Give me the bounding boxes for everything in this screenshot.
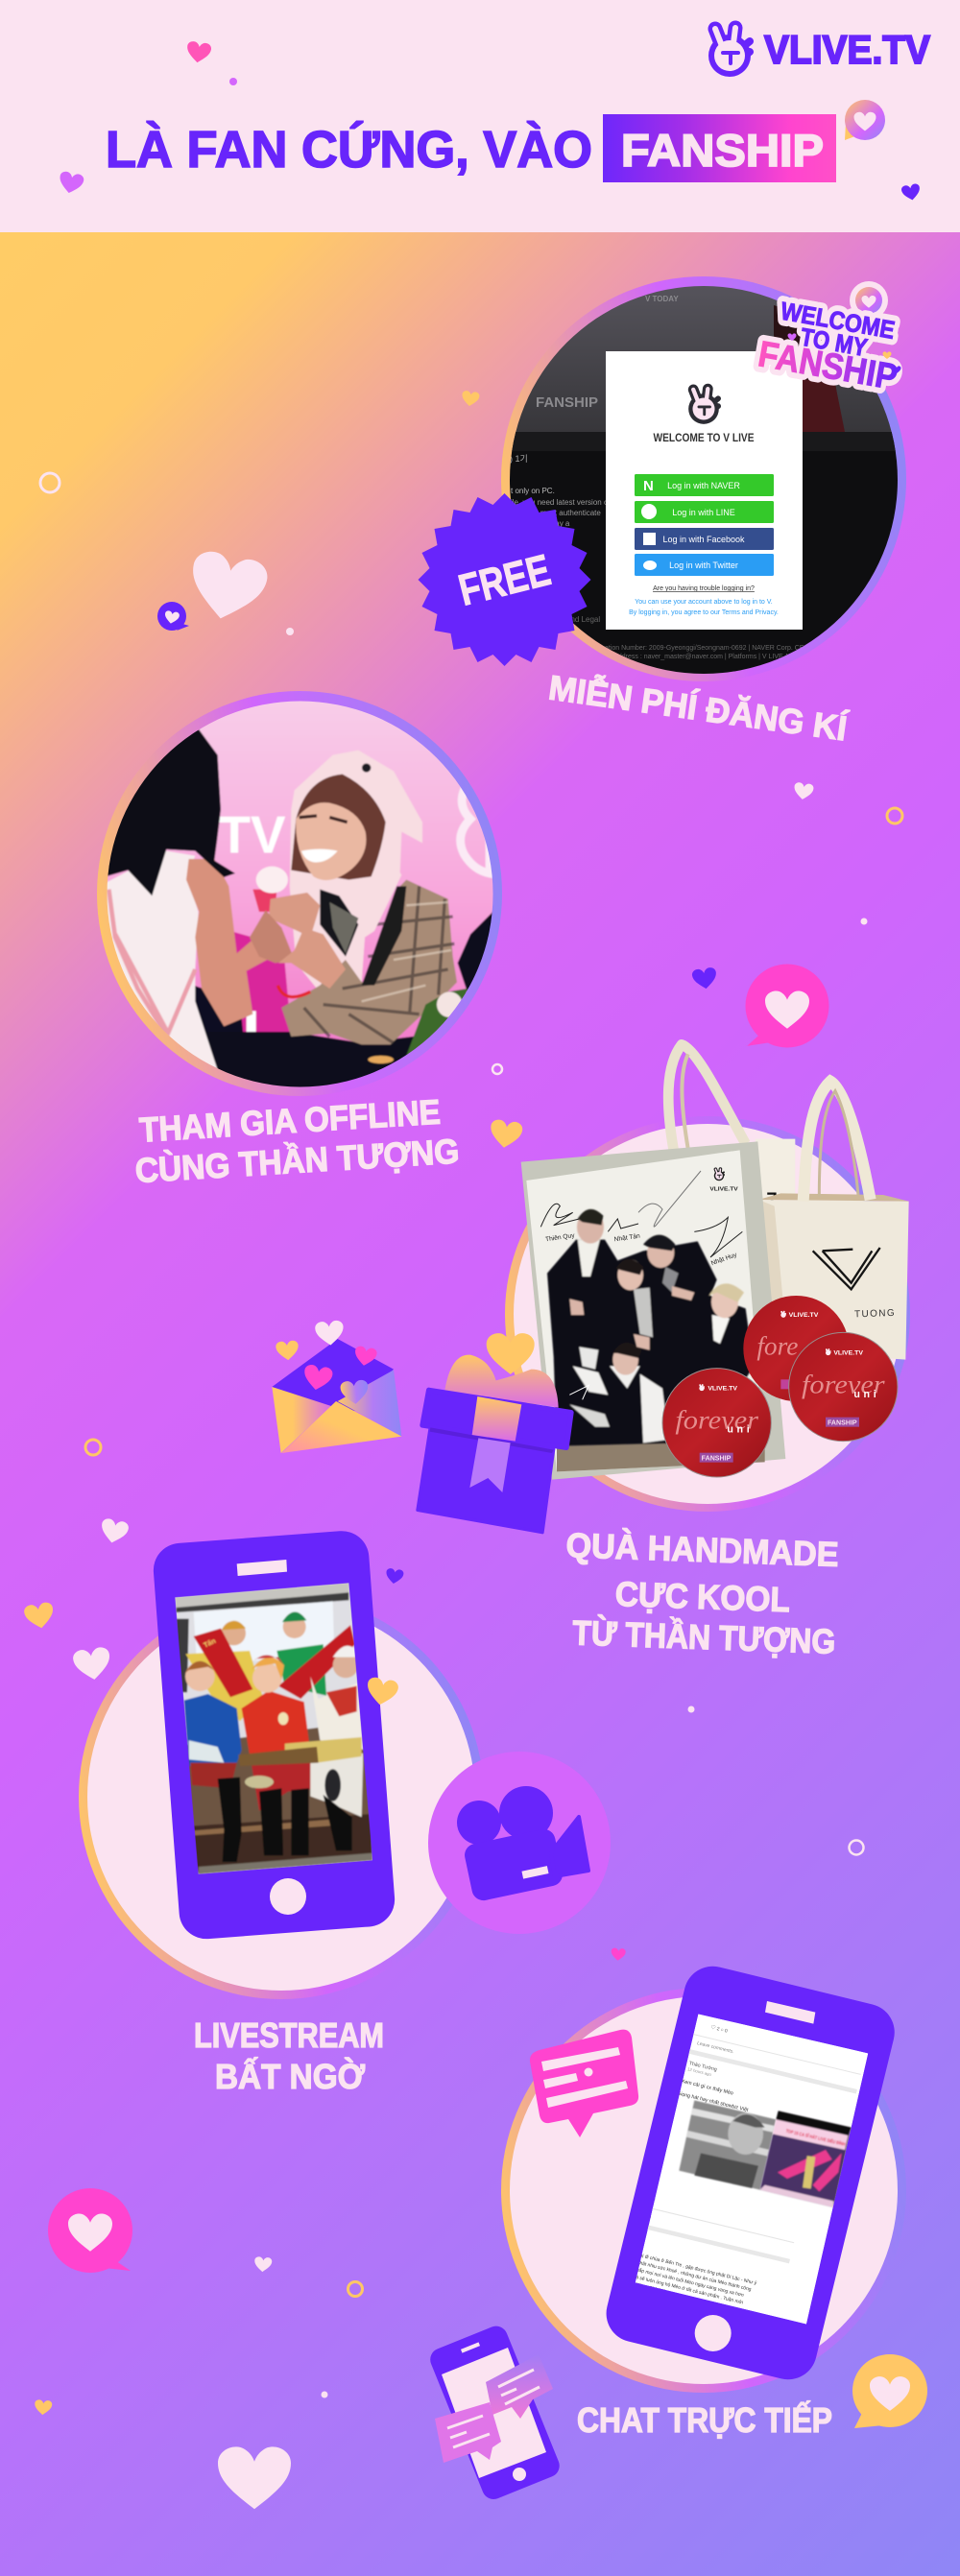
tote bag front: TUONG	[854, 1308, 895, 1320]
small phone screen	[442, 2348, 546, 2478]
badge: left: VLIVE.TV	[708, 1385, 738, 1392]
gradient ring	[501, 276, 906, 681]
badge: middle	[743, 1296, 849, 1401]
logo wordmark: VLIVE.TV	[764, 27, 930, 72]
title text: LÀ FAN CỨNG, VÀO	[106, 121, 592, 179]
pale disc	[514, 1124, 901, 1504]
badge: right: FANSHIP	[828, 1419, 857, 1426]
chat screenshot: Bảo Trần Triệu	[606, 2225, 640, 2238]
gradient ring	[97, 691, 502, 1096]
title	[106, 114, 836, 182]
badge: right: uni	[853, 1389, 876, 1400]
icon: small phone with chat bubbles	[427, 2323, 563, 2503]
phone with chat	[580, 1961, 900, 2385]
sticker words: TO MY	[799, 322, 870, 362]
speaker	[765, 2001, 815, 2024]
login card: By logging in, you agree to our Terms and Privacy.	[629, 609, 779, 616]
chat screenshot: ♡ 2 ○ 0	[710, 2025, 729, 2035]
envelope	[272, 1320, 401, 1453]
label: handmade gifts	[563, 1525, 839, 1661]
badge: middle: fore	[756, 1332, 798, 1361]
photo: singer black and white	[679, 2100, 776, 2190]
avatar	[673, 2057, 685, 2069]
label: offline meeting	[132, 1091, 460, 1190]
VLIVE.TV logo	[708, 27, 930, 77]
merch photo	[521, 1044, 909, 1480]
header decorations	[57, 40, 922, 202]
sticker backing: TO MY	[799, 322, 870, 362]
badge: left: forever	[675, 1405, 758, 1434]
photo: singer on stage	[760, 2111, 852, 2207]
chat screenshot: Giọng hát hay nhất showbiz Việt	[676, 2090, 749, 2113]
login card: WELCOME TO V LIVE	[653, 431, 755, 444]
photo: singer on stage: TOP 15 CA SĨ HÁT LIVE SIÊU ĐỈNH	[785, 2127, 847, 2148]
badge: middle: VLIVE.TV	[789, 1312, 819, 1319]
button: Twitter	[635, 554, 774, 576]
sticker backing	[756, 294, 907, 398]
chat screenshot: mắn ạ . Cầu cho Mèo thật nhiu sức khoẻ , những dự án của Mèo thành công	[592, 2248, 753, 2293]
gift box	[418, 1333, 571, 1533]
login screenshot: FANSHIP	[536, 394, 598, 411]
chat screenshot	[580, 2009, 868, 2327]
heart pink	[185, 40, 212, 64]
sticker words: WELCOME	[779, 297, 897, 345]
heart purple	[900, 183, 922, 202]
login screenshot: ation Number: 2009-Gyeonggi/Seongnam-0692 | NAVER Corp. CEO, Seong Sook Han	[605, 645, 864, 652]
login screenshot: t only on PC.	[511, 487, 555, 495]
tote bag back: 7	[766, 1190, 777, 1211]
line 3: TỪ THẦN TƯỢNG	[572, 1611, 836, 1661]
panel: offline meeting	[96, 691, 509, 1104]
button: Facebook: Log in with Facebook	[662, 535, 745, 544]
photo: fan meeting: TV	[218, 804, 286, 864]
bubble right	[486, 2354, 553, 2419]
login screenshot: address : naver_master@naver.com | Platforms | V LIVE App	[614, 654, 797, 660]
sticker backing: WELCOME	[779, 297, 897, 345]
badge: left: FANSHIP	[702, 1455, 732, 1462]
poster small text: Nhật Tân	[613, 1233, 641, 1243]
poster small text: Thiên Quy	[545, 1232, 576, 1243]
chat screenshot: Leave comments.	[696, 2040, 734, 2055]
badge: right: forever	[802, 1371, 885, 1399]
chat screenshot: Leave comments.	[618, 2187, 657, 2202]
icon: V logo	[688, 389, 719, 424]
welcome sticker	[756, 281, 907, 398]
button: Twitter: Log in with Twitter	[669, 561, 738, 570]
poster small text: Nhật Huy	[710, 1252, 738, 1267]
photo: group in ao dai	[173, 1581, 377, 1878]
tote bag back	[668, 1044, 795, 1211]
badge: right	[789, 1332, 898, 1442]
header background	[0, 0, 960, 232]
login card	[606, 351, 803, 630]
free badge	[419, 493, 591, 666]
tote bag front	[758, 1082, 909, 1360]
panel: free registration	[419, 276, 907, 681]
chat screenshot: Thảo Tường	[688, 2061, 717, 2073]
phone body	[600, 1961, 900, 2385]
line 1: LIVESTREAM	[194, 2015, 384, 2055]
small phone body	[427, 2323, 563, 2503]
small phone home button	[513, 2468, 526, 2481]
pale disc	[510, 1996, 898, 2384]
button: Facebook	[635, 528, 774, 550]
icon: pink chat bubble left	[48, 2188, 132, 2273]
free badge: FREE	[454, 544, 555, 615]
label: direct chat: CHAT TRỰC TIẾP	[577, 2400, 832, 2440]
button: Naver: N	[643, 478, 654, 494]
icon: video camera	[428, 1752, 611, 1934]
panel: livestream	[79, 1529, 484, 1999]
login card: Are you having trouble logging in?	[653, 585, 755, 592]
login screenshot: V TODAY	[645, 295, 679, 303]
sticker text	[756, 294, 907, 398]
login screenshot: ate, you must authenticate	[511, 509, 601, 517]
signatures	[540, 1171, 742, 1399]
ribbon bow	[444, 1355, 559, 1408]
poster logo	[714, 1169, 724, 1181]
icon: yellow chat bubble	[852, 2354, 927, 2428]
phone with photo	[152, 1529, 396, 1941]
button: Naver	[635, 474, 774, 496]
icon: envelope and gift	[272, 1320, 571, 1533]
login card: You can use your account above to log in to V.	[635, 599, 773, 606]
panel: direct chat	[501, 1961, 906, 2393]
chat screenshot: chị có thể làm như thế và sẽ luôn ủng hộ Mèo ở tất cả sản phẩm . Tuần mới	[586, 2262, 744, 2306]
chat screenshot: tới VCT tour bùng nổ khắp mọi nơi và lên tuổi Mèo ngày càng vang xa hơn	[588, 2255, 745, 2299]
chat screenshot: 12 hours ago	[603, 2231, 629, 2241]
title highlight word: FANSHIP	[621, 125, 824, 176]
chat screenshot: năng lượng làm việc nha Mèo . Chờ Mèo	[582, 2270, 669, 2296]
icon: purple chat bubble	[157, 602, 189, 631]
small phone speaker	[461, 2342, 480, 2353]
badge: left	[662, 1369, 771, 1477]
phone body	[152, 1529, 396, 1941]
login screenshot: ) 1기	[510, 454, 528, 464]
heart violet	[57, 171, 84, 196]
label: livestream	[194, 2015, 384, 2096]
gradient ring	[79, 1594, 484, 1999]
bubble left	[435, 2402, 501, 2463]
photo: fan meeting	[108, 701, 493, 1086]
home button	[695, 2315, 732, 2351]
speaker	[237, 1560, 287, 1576]
signed poster	[521, 1141, 785, 1480]
icon: pink chat bubble	[530, 2030, 638, 2137]
pale disc	[87, 1603, 475, 1991]
login screenshot: ly relationship	[511, 540, 558, 549]
chat bubble heart	[845, 100, 885, 140]
line 1: QUÀ HANDMADE	[565, 1525, 839, 1574]
login screenshot: and Legal	[566, 615, 600, 624]
gradient ring	[505, 1116, 910, 1512]
chat screenshot: Mèo ơi ! Hôm qua chị đi chùa ở Bến Tre , gặp được ông phật Di Lặc - Như ý	[598, 2242, 757, 2286]
sticker hearts	[787, 333, 900, 373]
title highlight box	[603, 114, 836, 182]
sticker backing: FANSHIP	[756, 334, 900, 398]
gradient ring	[501, 1988, 906, 2393]
badge: left: uni	[727, 1424, 750, 1436]
chat screenshot: Vu Cat Tuong liked this.	[602, 2202, 652, 2219]
badge: right: VLIVE.TV	[833, 1349, 864, 1356]
photo: group in ao dai: Tấn	[202, 1636, 217, 1649]
poster small text	[545, 1232, 738, 1267]
icon: big pink chat bubble	[745, 964, 829, 1048]
login screenshot: ile, you need latest version of the	[511, 498, 624, 507]
line 2: BẤT NGỜ	[215, 2056, 365, 2096]
login screenshot: name, you may a	[511, 519, 570, 528]
button: Naver: Log in with NAVER	[667, 481, 740, 490]
login screenshot: ler, when sub	[511, 530, 557, 538]
signed poster: VLIVE.TV	[709, 1187, 738, 1193]
floating hearts and dots	[23, 391, 902, 2509]
chat screenshot: 12 hours ago	[687, 2066, 712, 2077]
line 1: THAM GIA OFFLINE	[138, 1092, 442, 1150]
label: free registration: MIỄN PHÍ ĐĂNG KÍ	[546, 666, 851, 749]
sticker bubble	[850, 281, 888, 320]
sticker words: FANSHIP	[756, 334, 900, 398]
panel: handmade gifts	[505, 1044, 910, 1512]
home button	[270, 1878, 306, 1915]
login screenshot	[502, 278, 905, 681]
button: Line: Log in with LINE	[672, 508, 735, 517]
icon: peace hand	[708, 28, 751, 77]
chat screenshot: Xem cái gì cx thấy Mèo	[681, 2079, 733, 2097]
dot	[229, 78, 237, 85]
sticker words	[756, 294, 907, 398]
line 2: CÙNG THẦN TƯỢNG	[133, 1130, 460, 1190]
line 2: CỰC KOOL	[614, 1574, 791, 1619]
button: Line	[635, 501, 774, 523]
